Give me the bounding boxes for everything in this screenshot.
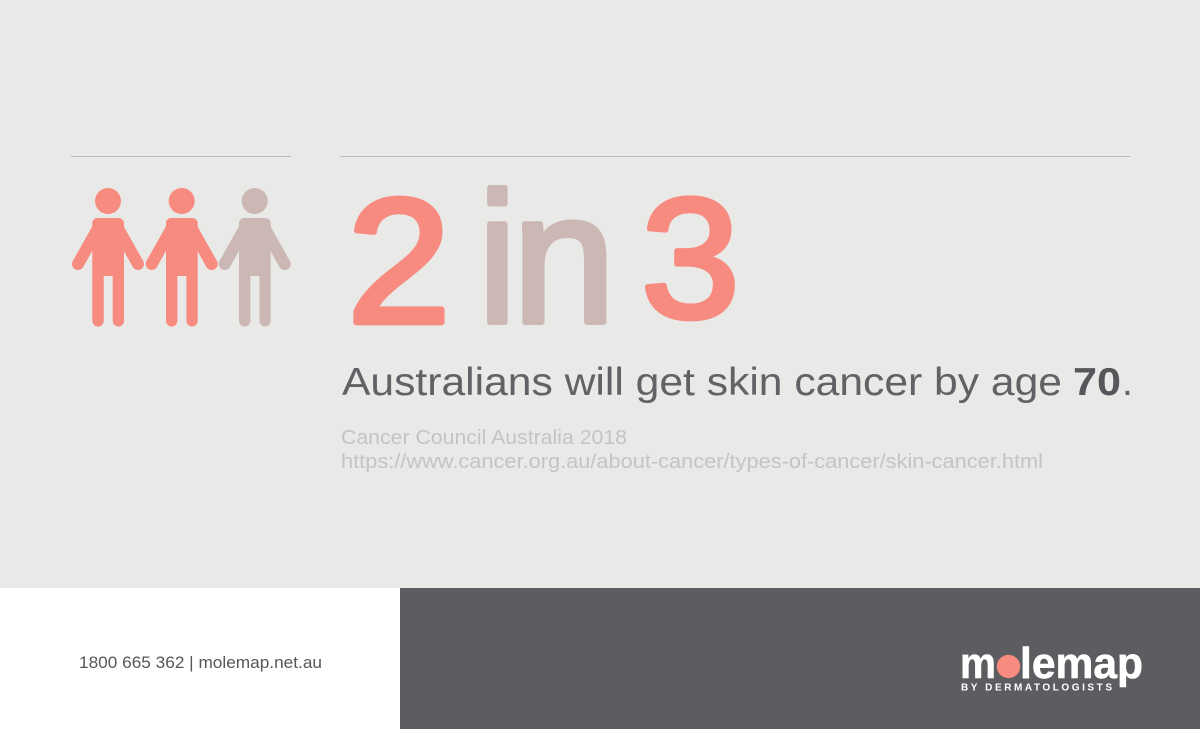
- logo: molemap by dermatologists: lemap: [1020, 639, 1143, 688]
- logo: molemap by dermatologists: BY DERMATOLOGISTS: [961, 682, 1112, 694]
- headline digit 2: 2: [347, 162, 451, 360]
- source citation: https://www.cancer.org.au/about-cancer/types-of-cancer/skin-cancer.html: [341, 451, 1043, 473]
- icon: person 2 highlighted: [152, 188, 212, 326]
- statement text: .: [1122, 361, 1133, 404]
- footer: logo panel: [400, 588, 1200, 729]
- contact details: 1800 665 362 | molemap.net.au: [79, 653, 322, 672]
- icon: person 1 highlighted: [78, 188, 138, 326]
- headline: 2 in 3: [347, 154, 740, 362]
- footer: contact panel: [0, 588, 400, 729]
- headline digit 3: 3: [641, 163, 740, 353]
- statement text: Australians will get skin cancer by age: [342, 361, 1062, 404]
- headline letter n: n: [512, 156, 615, 362]
- statement text: 70: [1073, 361, 1121, 404]
- icon group: three people, two highlighted: [78, 188, 285, 326]
- headline letter i: i: [478, 154, 516, 362]
- source citation: Cancer Council Australia 2018: [341, 427, 627, 449]
- icon: person 3 muted: [225, 188, 285, 326]
- logo: molemap by dermatologists: m: [960, 639, 996, 688]
- source citation: [341, 427, 1043, 473]
- logo: molemap by dermatologists: [960, 639, 1143, 694]
